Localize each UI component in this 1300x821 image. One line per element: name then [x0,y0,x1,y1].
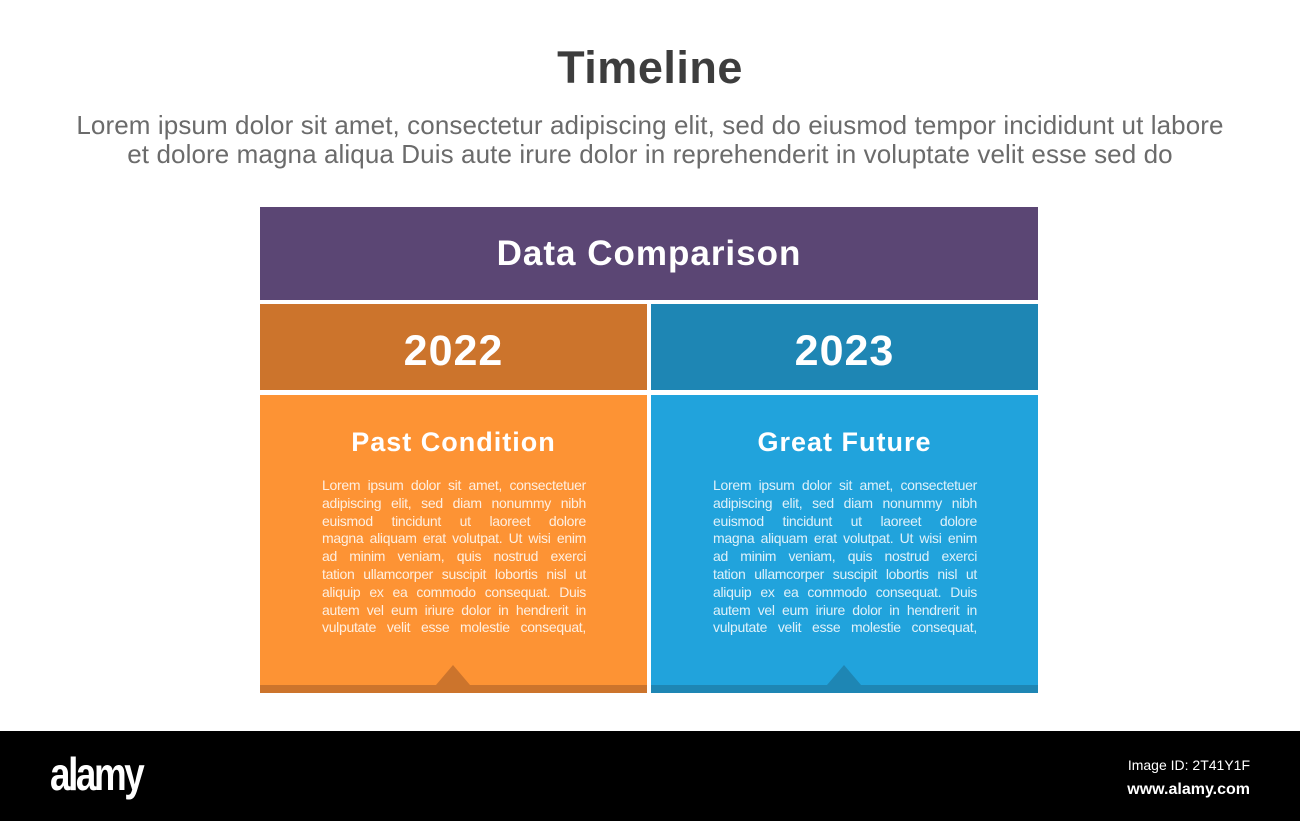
subtitle text: et dolore magna aliqua Duis aute irure dolor in reprehenderit in voluptate velit esse sed do [127,139,1173,169]
text block: magna aliquam erat volutpat. Ut wisi enim [713,530,977,546]
panel: great future [651,395,1038,693]
footer id text: Image ID: 2T41Y1F [1128,757,1250,773]
subtitle text [76,110,1224,169]
text block: ad minim veniam, quis nostrud exerci [713,548,977,564]
text block: euismod tincidunt ut laoreet dolore [322,513,586,529]
bottom pointer [651,665,1038,693]
footer logo: alamy [50,748,142,800]
text block: autem vel eum iriure dolor in hendrerit in [322,602,586,618]
text block: vulputate velit esse molestie consequat, [713,619,977,635]
header bar: Data Comparison: Data Comparison [497,234,801,273]
title: Timeline [557,42,743,93]
subtitle text: Lorem ipsum dolor sit amet, consectetur adipiscing elit, sed do eiusmod tempor incididunt ut labore [76,110,1224,140]
text block: adipiscing elit, sed diam nonummy nibh [713,495,977,511]
text block: aliquip ex ea commodo consequat. Duis [322,584,586,600]
bottom pointer [260,665,647,693]
year box: 2023 [651,304,1038,390]
text block: Lorem ipsum dolor sit amet, consectetuer [713,477,977,493]
panel: past condition [260,395,647,693]
year box: 2022 [260,304,647,390]
footer id text: www.alamy.com [1127,781,1250,798]
text block: tation ullamcorper suscipit lobortis nisl ut [322,566,586,582]
text block [713,477,978,635]
heading: Past Condition: Past Condition [351,427,556,457]
text block [322,477,586,635]
text block: aliquip ex ea commodo consequat. Duis [713,584,977,600]
year box: 2023: 2023 [795,327,894,375]
footer band [0,731,1300,821]
text block: Lorem ipsum dolor sit amet, consectetuer [322,477,586,493]
text block: ad minim veniam, quis nostrud exerci [322,548,586,564]
heading: Great Future: Great Future [757,427,932,457]
text block: autem vel eum iriure dolor in hendrerit in [713,602,977,618]
text block: euismod tincidunt ut laoreet dolore [713,513,977,529]
text block: vulputate velit esse molestie consequat, [322,619,586,635]
year box: 2022: 2022 [404,327,503,375]
header bar: Data Comparison [260,207,1038,300]
footer id text [1127,757,1250,798]
text block: tation ullamcorper suscipit lobortis nisl ut [713,566,977,582]
text block: adipiscing elit, sed diam nonummy nibh [322,495,586,511]
text block: magna aliquam erat volutpat. Ut wisi enim [322,530,586,546]
